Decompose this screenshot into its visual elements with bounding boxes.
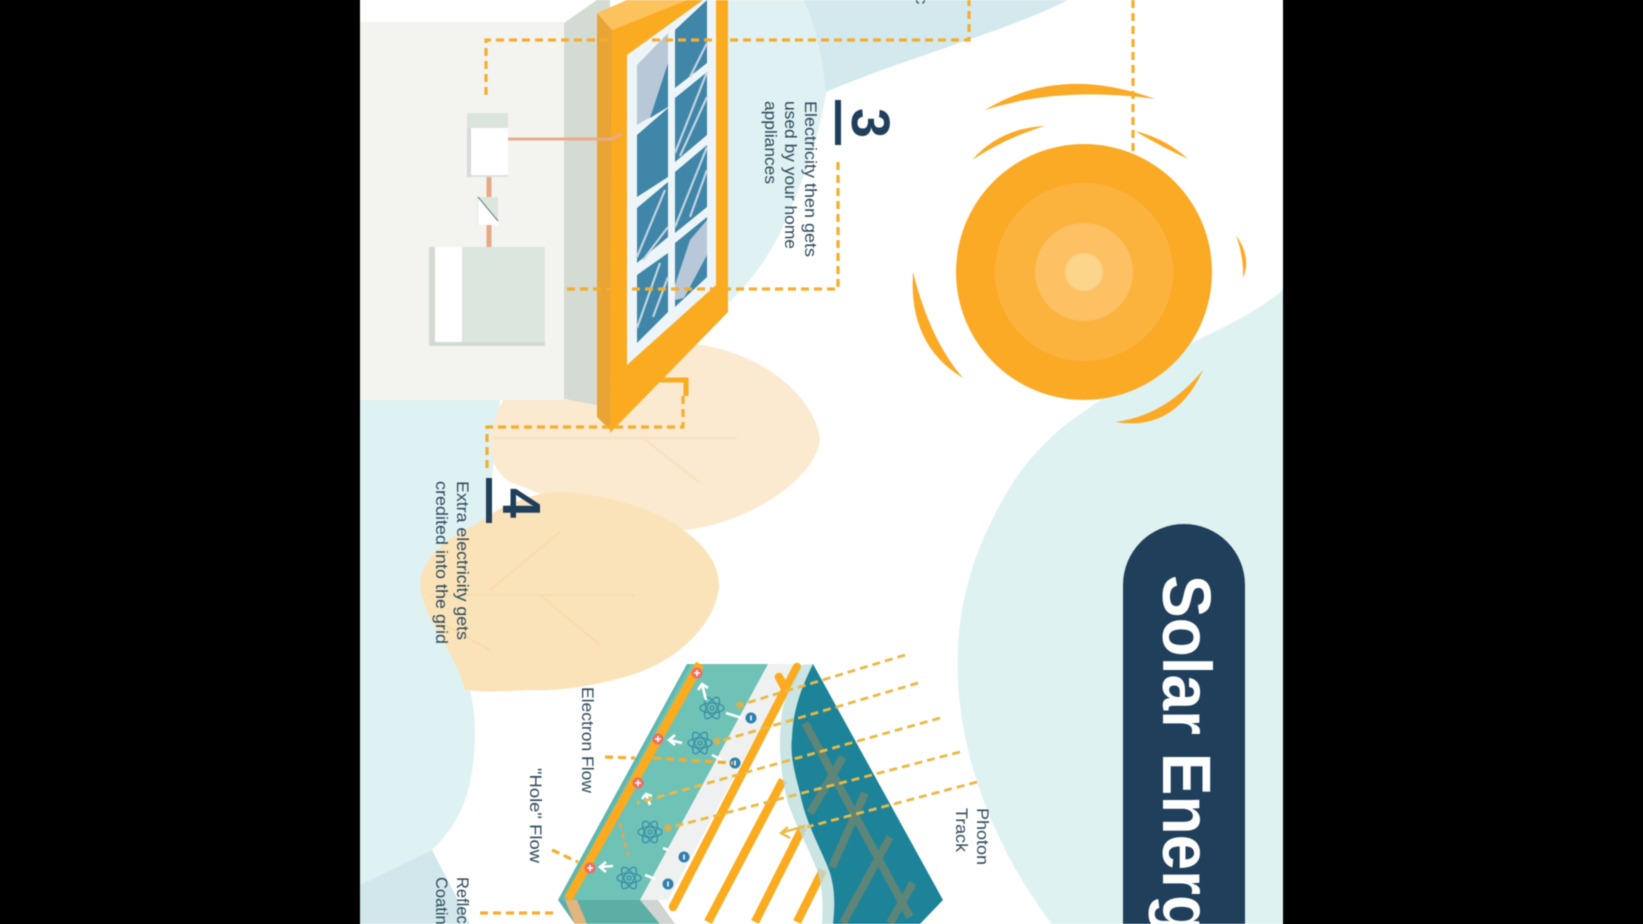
title text: Solar Energ: [1147, 575, 1224, 924]
bracket stub under window: [660, 380, 686, 396]
front contact stripes: [673, 667, 823, 922]
step 4 text: [432, 481, 471, 644]
step 4 text: credited into the grid: [432, 481, 450, 644]
icon: sun: [913, 84, 1246, 423]
inverter: [477, 177, 498, 247]
step 3 text: appliances: [761, 101, 779, 184]
dashed connector: sun to panel: [1131, 0, 1135, 152]
background: light teal blob behind window: [720, 0, 826, 310]
label: reflective coating: Reflec: [453, 877, 471, 924]
meter box: [467, 113, 508, 177]
dashed connector: step 3: [564, 162, 838, 289]
photon tracks: [637, 655, 977, 838]
glass cross pattern: [805, 723, 913, 923]
label: electron flow: Electron Flow: [578, 687, 596, 793]
sun flares: [913, 84, 1246, 423]
background: darker teal corner lower left: [360, 850, 470, 924]
label: hole flow: "Hole" Flow: [526, 768, 544, 863]
step 4 number: 4: [491, 488, 551, 518]
cell grey edge: [640, 900, 675, 924]
cell white layer: [640, 664, 800, 924]
label: photon track: [952, 808, 991, 865]
hole flow pointer: [552, 850, 578, 862]
panel: white sheet: [359, 0, 1284, 291]
step 3 text: used by your home: [781, 101, 799, 249]
step 4 text: Extra electricity gets: [453, 481, 471, 640]
step 3 number: 3: [840, 108, 900, 138]
step 3 bar: [835, 100, 841, 145]
label: reflective coating: Coatin: [432, 877, 450, 924]
house solar panel window: [597, 0, 728, 433]
label: reflective coating: [432, 877, 471, 924]
background: teal blob lower left: [360, 400, 500, 885]
cell side face: [558, 900, 660, 924]
dark teal glass: [791, 664, 943, 924]
cell outer teal layer: [558, 664, 768, 900]
leaf: front leaf: [420, 492, 719, 692]
electron flow pointer: [605, 757, 733, 763]
step 3 text: Electricity then gets: [801, 101, 819, 257]
cell back conductor: [568, 664, 700, 899]
house side wall: [564, 0, 610, 405]
label: photon track: Track: [952, 808, 970, 853]
window panes: [637, 0, 707, 343]
electrons: [662, 712, 756, 890]
reflective coating pointer: [480, 911, 558, 915]
dashed connector: step 4: [487, 396, 683, 470]
leaf: pale leaf: [491, 344, 820, 530]
background: darker teal blob top: [804, 0, 1068, 92]
battery: [429, 247, 545, 346]
white arrows: [600, 684, 742, 879]
atoms: [617, 695, 724, 891]
step 4 bar: [486, 478, 492, 523]
flow arrow in cell: [620, 823, 628, 856]
holes: [584, 668, 702, 874]
house wall: [360, 22, 565, 400]
dashed connector: top: [486, 0, 969, 95]
wire: meter to panel: [508, 133, 622, 139]
glass wave band: [780, 664, 834, 924]
label: photon track: Photon: [973, 808, 991, 865]
step 3 text: [761, 101, 819, 257]
background: large teal circle with title: [957, 290, 1283, 924]
title pill: [1123, 524, 1245, 924]
solar cell diagram: [552, 655, 977, 924]
